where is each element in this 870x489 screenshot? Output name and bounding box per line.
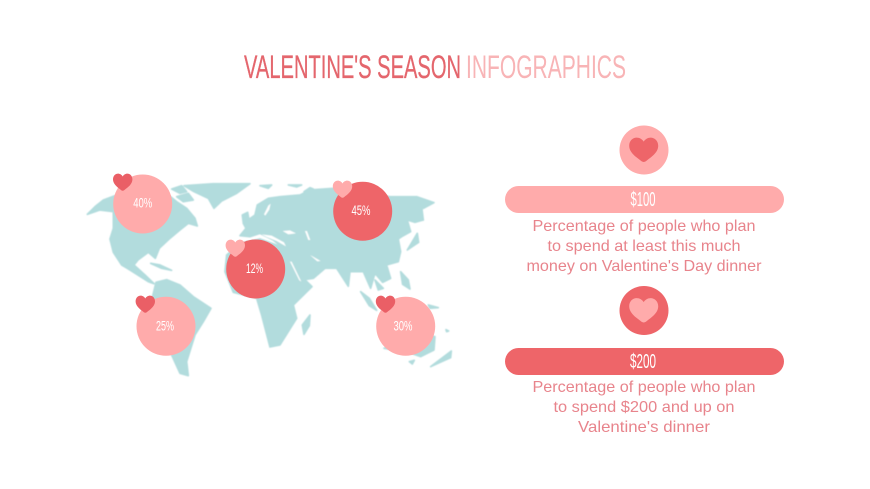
Africa [225, 239, 312, 347]
title: VALENTINE'S SEASON [244, 49, 461, 85]
bubble: 45% [333, 181, 392, 241]
landmasses [87, 184, 451, 376]
text: $100 description [526, 218, 762, 275]
bubble: 40% [113, 174, 172, 234]
bubble: 30%: 30% [394, 318, 412, 334]
North America [87, 188, 197, 284]
Indonesia and Philippines [361, 272, 449, 332]
Red Sea [290, 262, 301, 282]
bubble: 12%: 12% [246, 260, 263, 276]
world map [87, 184, 451, 376]
bubble: 45%: 45% [352, 202, 370, 218]
icon: heart in dark circle [620, 286, 668, 335]
bubble: 40%: 40% [133, 194, 152, 210]
label bar: $200 [505, 348, 784, 375]
South America [151, 280, 211, 376]
Persian Gulf [310, 255, 321, 261]
Caribbean [151, 263, 172, 270]
Australia [384, 332, 435, 357]
Baltic [264, 204, 271, 216]
icon: heart in light circle [620, 126, 668, 174]
Greenland [184, 184, 250, 208]
text: $200 description [532, 379, 756, 436]
text: $100 description: to spend at least this much [548, 238, 740, 255]
label bar: $100 [505, 186, 784, 213]
text: $200 description: Percentage of people who plan [532, 379, 756, 396]
Kamchatka and Japan [407, 207, 423, 250]
panel: $200 [505, 286, 784, 436]
map inland water [262, 204, 321, 282]
Arctic islands [172, 186, 193, 202]
bubble: 25% [136, 296, 196, 356]
text: $100 description: money on Valentine's Day dinner [526, 258, 762, 275]
bubble: 30% [376, 296, 435, 356]
text: $200 description: to spend $200 and up on [554, 399, 734, 416]
title: INFOGRAPHICS [466, 49, 626, 85]
bubble: 25%: 25% [156, 318, 174, 334]
Mediterranean [262, 234, 286, 246]
text: $200 description: Valentine's dinner [578, 419, 711, 436]
Madagascar [302, 315, 310, 334]
label bar: $100: $100 [630, 189, 656, 211]
Arctic specks [260, 185, 313, 193]
label bar: $200: $200 [630, 351, 656, 373]
New Zealand and Tasmania [409, 351, 451, 367]
Eurasia [240, 188, 434, 288]
Black Sea [283, 230, 296, 234]
British Isles [242, 212, 249, 223]
panel: $100 [505, 126, 784, 275]
bubble: 12% [226, 240, 285, 298]
Caspian [305, 231, 310, 240]
text: $100 description: Percentage of people who plan [532, 218, 756, 235]
